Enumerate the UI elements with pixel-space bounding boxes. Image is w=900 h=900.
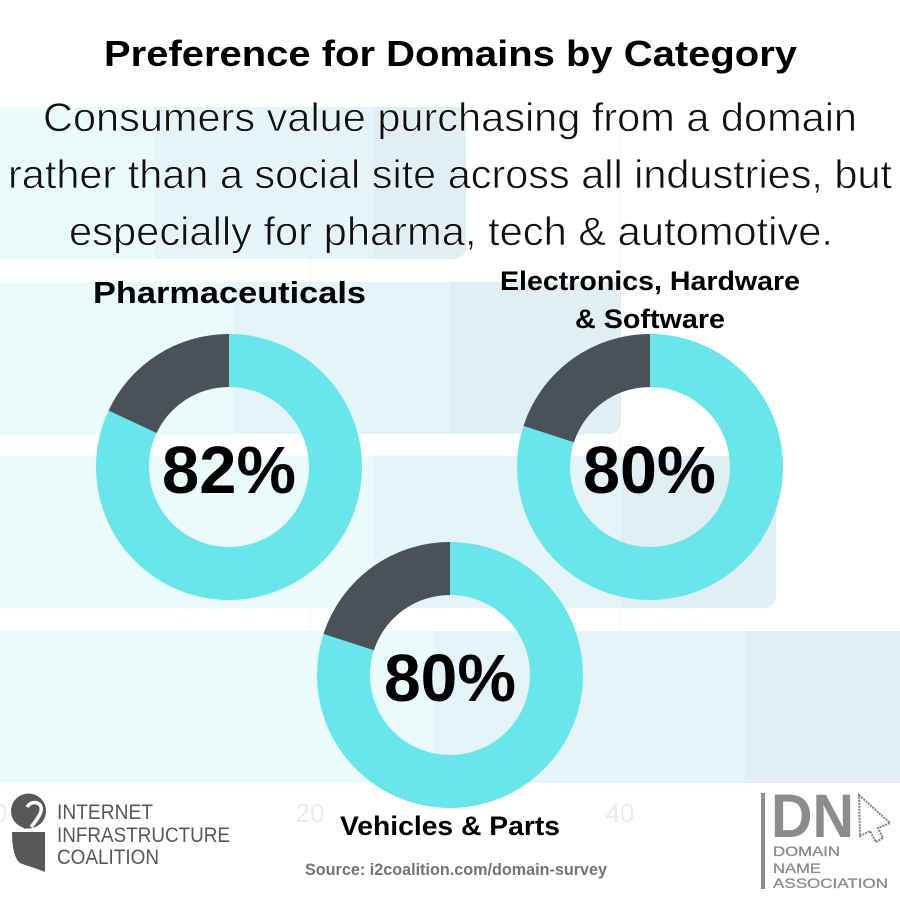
source note: Source: i2coalition.com/domain-survey (305, 861, 608, 879)
heading: Electronics, Hardware & Software: Electronics, Hardware (500, 266, 800, 296)
donut chart: Pharmaceuticals 82%: 82% (162, 433, 296, 508)
subtitle: especially for pharma, tech & automotive. (69, 210, 833, 254)
axis labels: 40 (606, 798, 634, 828)
icon: pixel cursor (859, 795, 890, 842)
logo: Domain Name Association (761, 782, 890, 891)
heading: Electronics, Hardware & Software (500, 266, 800, 334)
donut chart: Pharmaceuticals 82% (109, 334, 335, 574)
subtitle: rather than a social site across all industries, but (8, 153, 892, 197)
logo text (773, 844, 888, 891)
background bar 2 (0, 282, 621, 434)
title: Preference for Domains by Category (104, 33, 797, 74)
axis labels: 20 (296, 798, 324, 828)
logo text: ASSOCIATION (773, 876, 888, 891)
subtitle (8, 96, 892, 254)
axis labels (0, 798, 634, 828)
icon: i2 mark (11, 794, 46, 872)
heading: Electronics, Hardware & Software: & Software (575, 304, 725, 334)
subtitle: Consumers value purchasing from a domain (43, 96, 857, 140)
background bar 3 (0, 456, 776, 608)
heading: Pharmaceuticals: Pharmaceuticals (93, 275, 366, 310)
logo text: DOMAIN (773, 844, 840, 859)
background bar 1 (0, 107, 466, 259)
logo text (57, 801, 230, 869)
logo text: COALITION (57, 846, 159, 869)
logo: Internet Infrastructure Coalition (11, 794, 230, 872)
donut chart: Electronics 80% (524, 334, 756, 574)
logo text: NAME (773, 861, 821, 876)
donut chart: Vehicles & Parts 80% (324, 542, 556, 782)
donut chart: Vehicles & Parts 80%: 80% (384, 641, 516, 716)
heading: Vehicles & Parts: Vehicles & Parts (340, 811, 560, 841)
background bar 4 (0, 631, 900, 783)
donut chart: Electronics 80%: 80% (583, 433, 716, 508)
logo text: INFRASTRUCTURE (57, 824, 230, 847)
logo letters DN: DN (771, 782, 854, 850)
logo text: INTERNET (57, 801, 153, 824)
